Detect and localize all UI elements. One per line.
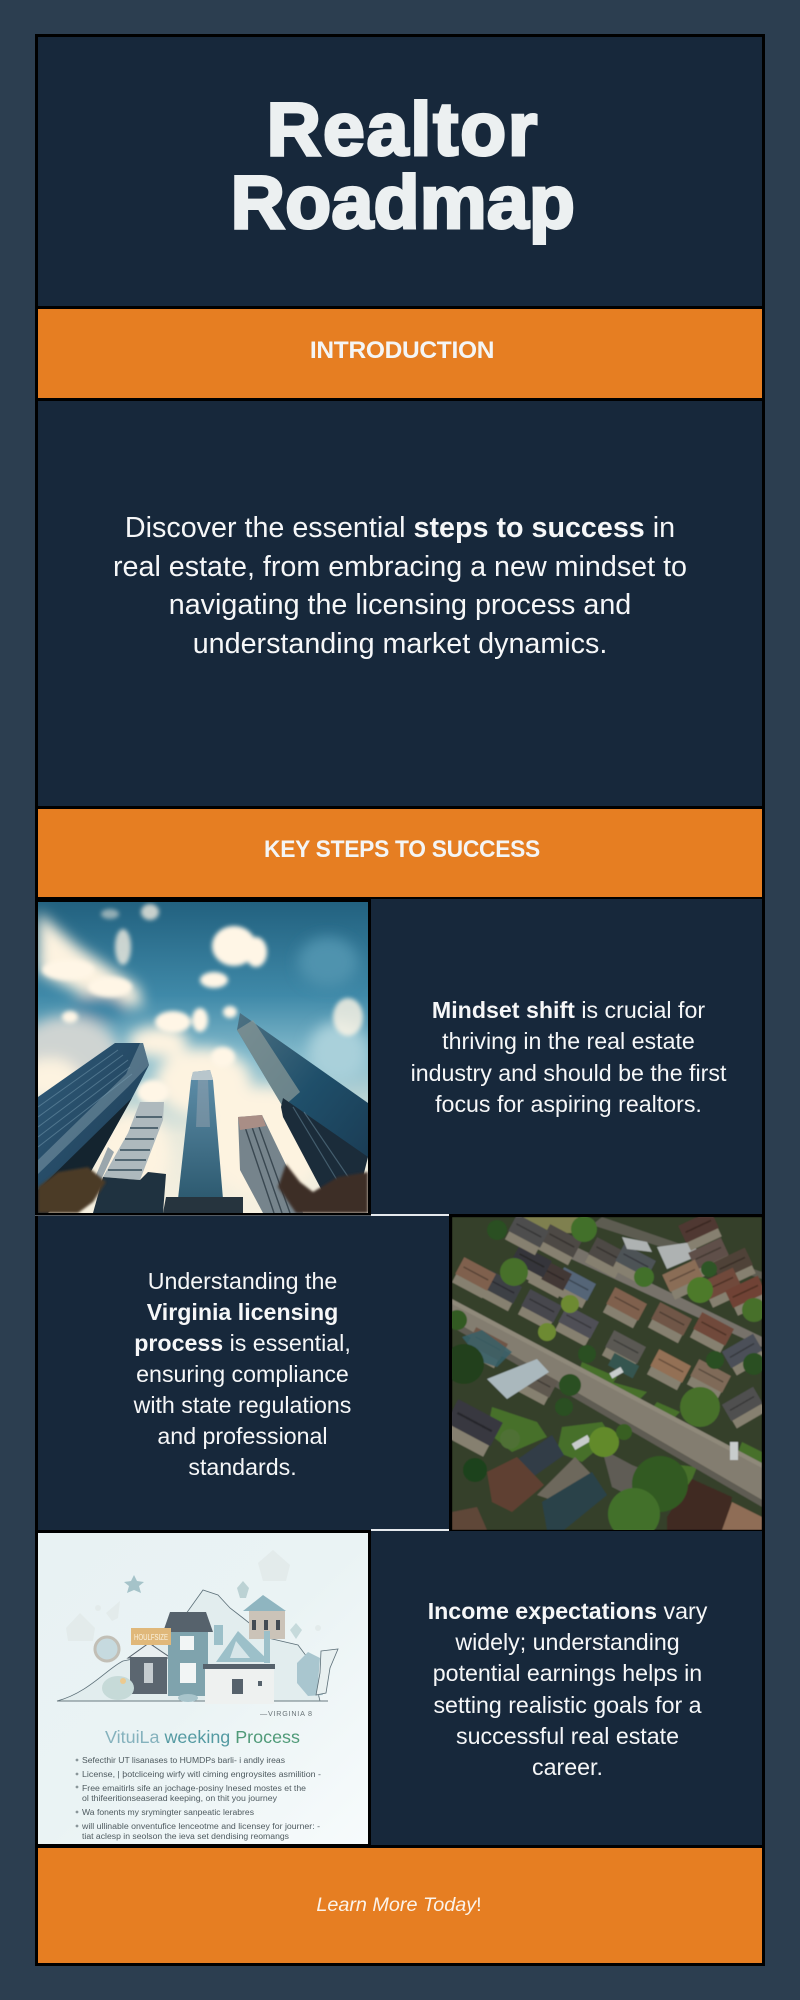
center tower <box>178 1070 223 1199</box>
licensing text: ensuring compliance <box>136 1361 349 1387</box>
trees <box>38 1164 368 1213</box>
location label: —VIRGINIA 8 <box>260 1709 312 1718</box>
licensing text: Virginia licensing <box>147 1299 338 1325</box>
licensing text: process is essential, <box>134 1330 351 1356</box>
income text: successful real estate <box>456 1723 679 1749</box>
step 2 image: aerial neighbourhood <box>452 1217 762 1530</box>
licensing text: and professional <box>157 1423 328 1449</box>
intro paragraph: understanding market dynamics. <box>193 628 607 660</box>
image frame stroke <box>449 1214 452 1531</box>
mindset shift text: thriving in the real estate <box>442 1028 695 1054</box>
title: Roadmap <box>231 160 575 244</box>
white house <box>205 1668 274 1704</box>
heading band: key steps <box>38 809 762 897</box>
light blue house <box>216 1631 270 1662</box>
illustration bullet list: Wa fonents my srymingter sanpeatic lerabres <box>82 1808 254 1817</box>
right short tower <box>238 1115 303 1213</box>
upper road <box>567 1245 762 1347</box>
illustration bullet list: will ullinable onventufice lenceotme and licensey for journer: - <box>81 1822 320 1831</box>
faint background shapes <box>66 1550 321 1641</box>
step 3 image: virginia licensing illustration <box>38 1533 368 1844</box>
sign <box>131 1628 171 1645</box>
intro paragraph: Discover the essential steps to success in <box>125 512 675 544</box>
panel: step 1 text <box>371 899 762 1214</box>
income text: setting realistic goals for a <box>433 1692 702 1718</box>
plants <box>102 1676 134 1700</box>
heading band: introduction <box>38 309 762 398</box>
panel: introduction text <box>38 401 762 806</box>
footer band <box>38 1848 762 1963</box>
illustration bullet list: Sefecthir UT lisanases to HUMDPs barli- i andly ireas <box>82 1756 285 1765</box>
mindset shift text: Mindset shift is crucial for <box>432 997 705 1023</box>
intro paragraph: navigating the licensing process and <box>169 589 631 621</box>
illustration bullet list: ol thifeeritionseaserad keeping, on thit you journey <box>82 1794 277 1803</box>
title: Realtor <box>267 87 539 171</box>
center blue house <box>168 1631 208 1696</box>
right tower <box>237 1013 368 1180</box>
magnifier <box>95 1637 119 1661</box>
licensing text: standards. <box>188 1454 297 1480</box>
heading: KEY STEPS TO SUCCESS <box>264 836 540 863</box>
divider under step 1 <box>371 1214 451 1216</box>
main road <box>452 1303 762 1500</box>
income text: career. <box>532 1754 603 1780</box>
illustration bullet list: tiat aclesp in seolson the ieva set dendising reomangs <box>82 1832 289 1841</box>
trees <box>444 1216 766 1540</box>
step 3 image: virginia licensing illustration: HOULFSIZE <box>134 1633 168 1642</box>
step 1 image: skyscrapers <box>38 902 368 1213</box>
illustration bullet list <box>76 1756 321 1841</box>
tan house <box>243 1595 286 1639</box>
left tower <box>38 1043 149 1213</box>
illustration heading: VituiLa weeking Process <box>105 1727 300 1747</box>
income text: widely; understanding <box>455 1629 680 1655</box>
licensing text <box>134 1268 351 1480</box>
cars <box>572 1367 738 1460</box>
licensing text: with state regulations <box>134 1392 351 1418</box>
panel: step 2 text <box>38 1216 449 1530</box>
panel: step 3 text <box>371 1531 762 1845</box>
income text: potential earnings helps in <box>433 1660 702 1686</box>
call to action: Learn More Today! <box>316 1894 482 1916</box>
title <box>231 87 575 245</box>
panel: title <box>38 37 762 306</box>
divider under step 2 <box>371 1529 451 1531</box>
intro paragraph <box>113 512 687 660</box>
licensing text: Understanding the <box>148 1268 337 1294</box>
intro paragraph: real estate, from embracing a new mindset to <box>113 551 687 583</box>
star and leaves <box>124 1575 144 1593</box>
mindset shift text: industry and should be the first <box>411 1060 726 1086</box>
income text <box>428 1598 708 1780</box>
lawns <box>487 1362 762 1492</box>
mindset shift text <box>411 997 726 1117</box>
step row separator <box>35 1215 371 1216</box>
mountains and state outline <box>57 1590 320 1701</box>
houses <box>602 1287 647 1329</box>
heading: INTRODUCTION <box>310 337 494 364</box>
illustration bullet list: Free emaitirls sife an jochage-posiny lnesed mostes et the <box>82 1784 306 1793</box>
illustration bullet list: License, | þotcliceing wirfy witl ciming engroysites asmilition - <box>82 1770 321 1779</box>
income text: Income expectations vary <box>428 1598 707 1624</box>
small mid tower <box>103 1102 164 1180</box>
dark house <box>128 1643 171 1658</box>
mindset shift text: focus for aspiring realtors. <box>435 1091 702 1117</box>
